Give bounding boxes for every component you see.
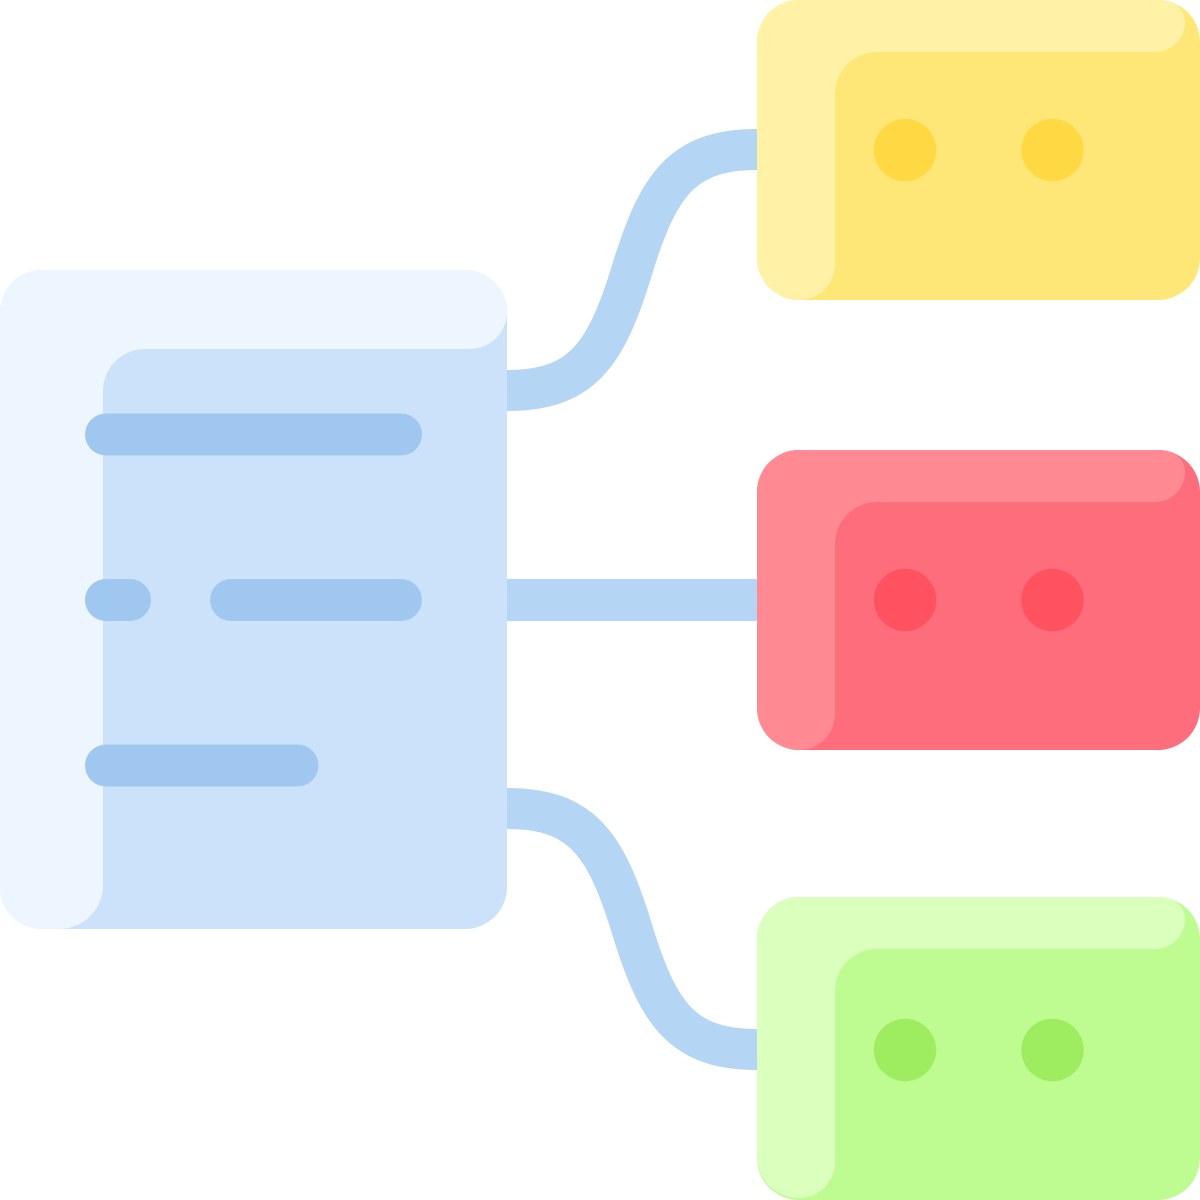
panel: yellow box [757, 0, 1200, 300]
yellow dot left [874, 119, 936, 181]
panel: red box [757, 450, 1200, 750]
red dot left [874, 569, 936, 631]
red dot right [1021, 569, 1084, 631]
document line 3 [85, 744, 318, 786]
document line 1 [85, 414, 422, 456]
connector: bottom [500, 808, 765, 1050]
connector: top [500, 150, 765, 390]
document line 2 short [85, 579, 151, 621]
yellow dot right [1021, 119, 1084, 181]
panel: source document [0, 270, 507, 929]
document line 2 long [210, 579, 422, 621]
panel: green box [757, 897, 1200, 1200]
green dot left [874, 1019, 936, 1081]
connector: middle [500, 579, 765, 621]
green dot right [1021, 1019, 1084, 1081]
